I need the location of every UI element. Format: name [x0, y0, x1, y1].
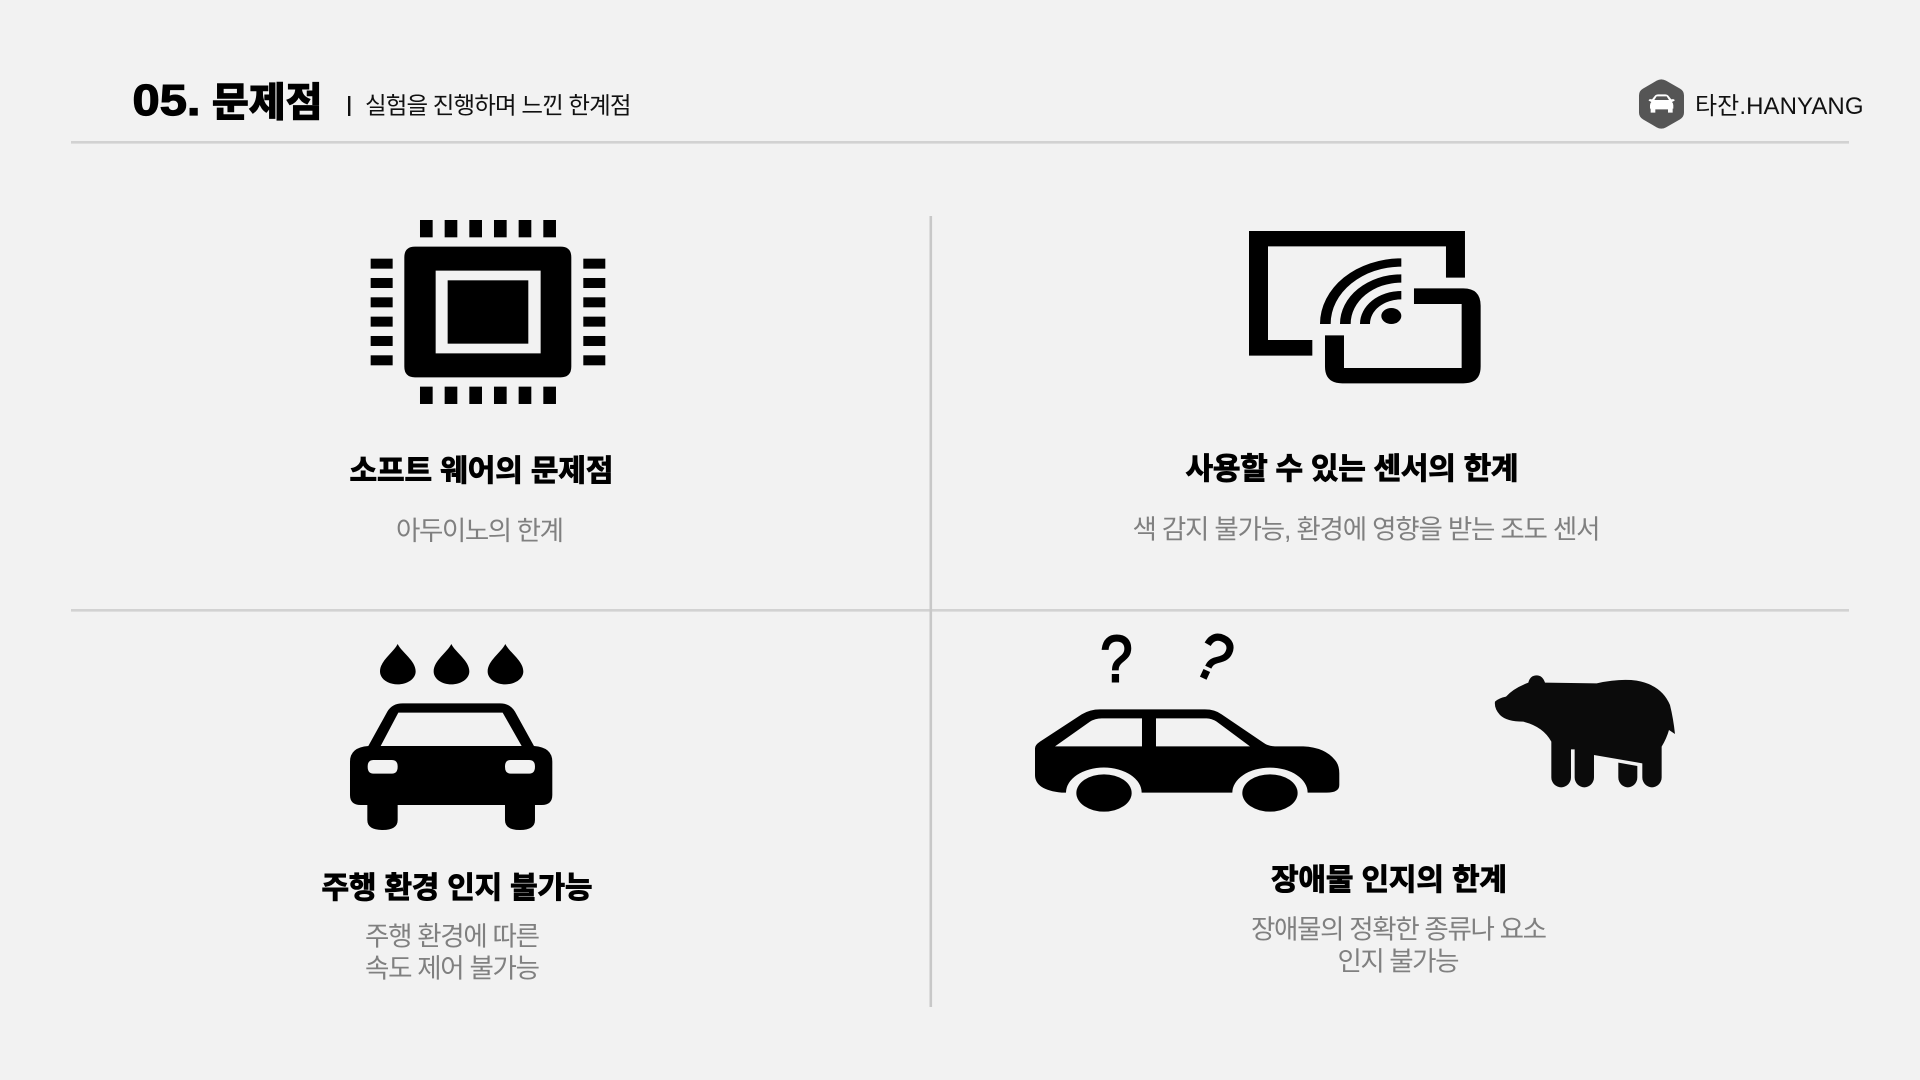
description: 아두이노의 한계	[396, 516, 564, 546]
icon: side-view car	[1035, 709, 1339, 812]
panel: driving environment	[322, 644, 592, 984]
icon: question marks	[1100, 618, 1244, 698]
panel: software problem	[350, 220, 614, 546]
title: 05.	[132, 76, 200, 125]
description: 주행 환경에 따른	[365, 922, 540, 952]
panel: obstacle recognition	[1035, 618, 1675, 976]
description: 장애물의 정확한 종류나 요소	[1251, 914, 1547, 944]
title	[132, 76, 322, 125]
icon: car in rain	[350, 644, 552, 830]
icon: logo hexagon	[1639, 79, 1684, 129]
icon: microchip	[371, 220, 605, 404]
icon: bear	[1495, 675, 1675, 787]
subtitle: 실험을 진행하며 느낀 한계점	[365, 92, 632, 118]
icon: question marks: ?	[1184, 618, 1244, 698]
heading: 주행 환경 인지 불가능	[322, 872, 592, 905]
icon: question marks: ?	[1100, 623, 1133, 696]
heading: 사용할 수 있는 센서의 한계	[1186, 453, 1518, 486]
panel: driving environment: 속도 제어 불가능	[365, 954, 540, 984]
title: 문제점	[212, 81, 322, 125]
panel: sensor limits	[1132, 231, 1600, 544]
brand name: 타잔.HANYANG	[1695, 93, 1864, 120]
panel: obstacle recognition: 인지 불가능	[1338, 946, 1460, 976]
heading: 장애물 인지의 한계	[1271, 864, 1507, 897]
icon: wireless screens	[1249, 231, 1481, 383]
heading: 소프트 웨어의 문제점	[350, 455, 614, 488]
logo: hexagon with car and brand name	[1639, 79, 1864, 129]
description: 색 감지 불가능, 환경에 영향을 받는 조도 센서	[1132, 514, 1600, 544]
